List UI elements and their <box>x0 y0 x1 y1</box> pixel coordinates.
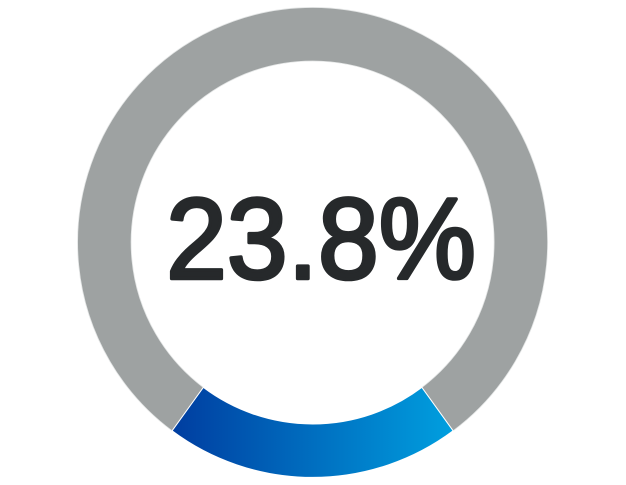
percentage value: 23.8% <box>166 174 476 303</box>
blue ring segment 23.8% <box>172 387 453 477</box>
grey ring segment <box>78 7 548 431</box>
